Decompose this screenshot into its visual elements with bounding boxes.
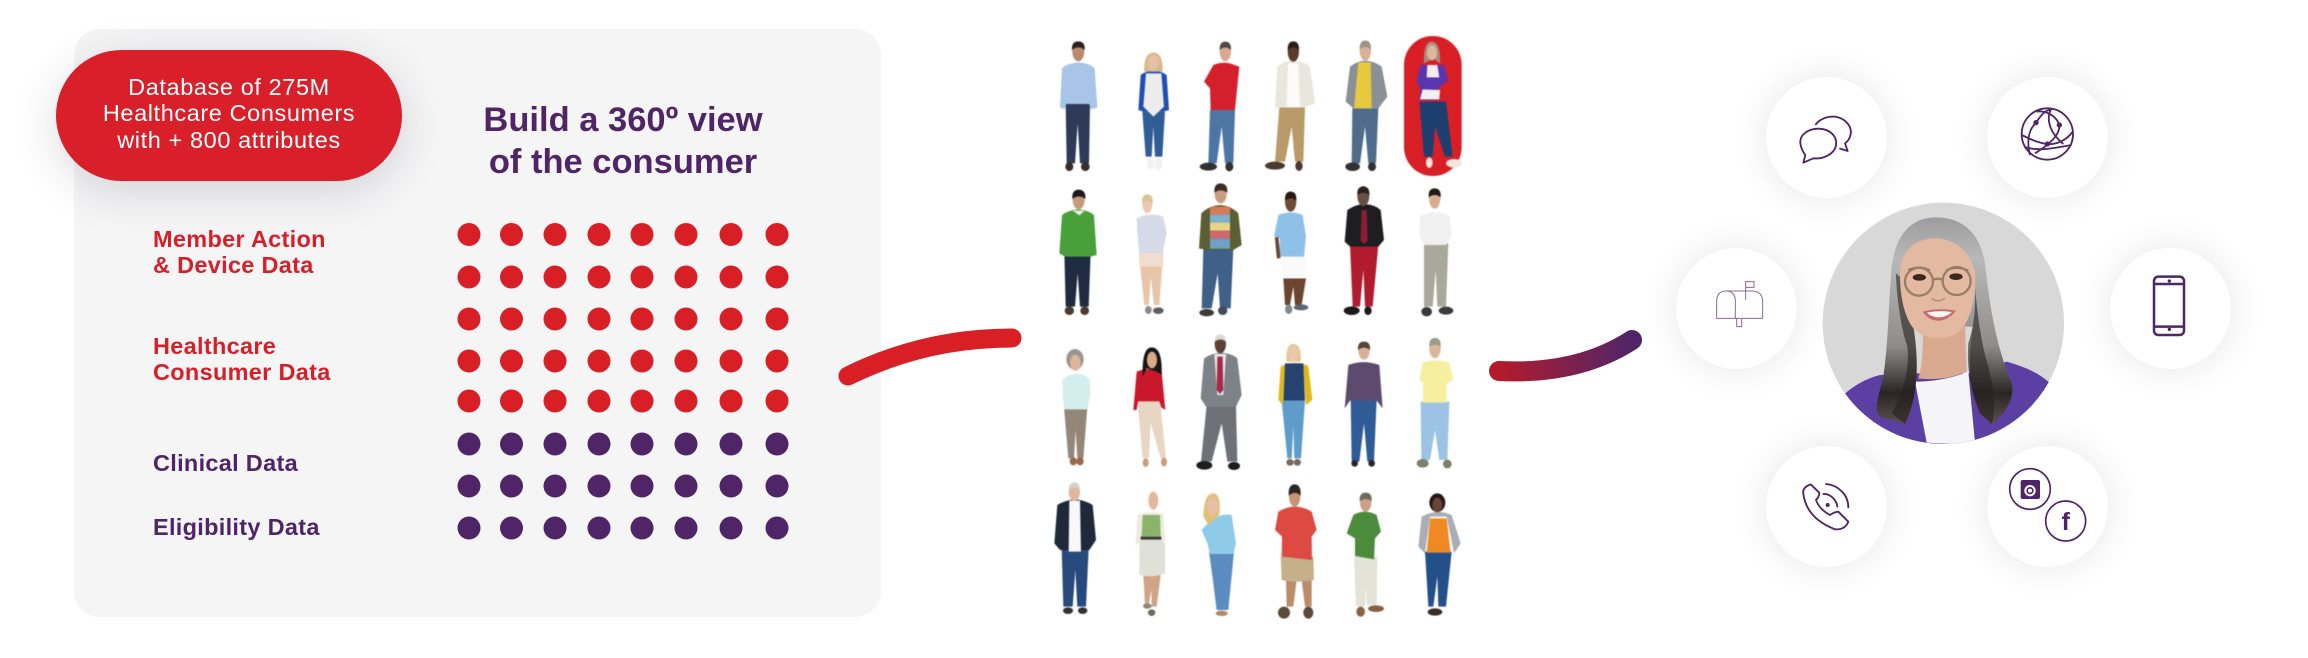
heading: build a 360 view: of the consumer (489, 142, 757, 180)
person 18 (1417, 338, 1453, 468)
icon bubble: phone call (1766, 446, 1887, 566)
label: clinical data: Clinical Data (153, 450, 298, 476)
heading: build a 360 view: Build a 360º view (483, 101, 763, 139)
person 4 (1265, 41, 1315, 171)
label: eligibility data: Eligibility Data (153, 514, 320, 540)
person 22 (1275, 484, 1317, 619)
person 9 (1199, 183, 1242, 316)
icon: instagram and facebook: f (2061, 508, 2070, 536)
icon bubble: social media (1986, 446, 2108, 566)
label: member action and device data (153, 226, 326, 278)
person 3 (1200, 42, 1239, 171)
callout text: Database of 275M (128, 74, 330, 100)
callout: database pill (56, 50, 402, 181)
person 7 (1059, 190, 1097, 315)
person 17 (1345, 342, 1383, 467)
label: healthcare consumer data (153, 333, 331, 385)
person 14 (1133, 347, 1167, 467)
person 20 (1136, 492, 1166, 616)
icon bubble: chat (1766, 77, 1887, 198)
person 13 (1062, 349, 1091, 465)
person 1 (1060, 41, 1097, 171)
highlight: red pill behind selected person (1404, 36, 1462, 176)
label: member action and device data: & Device Data (153, 252, 314, 278)
heading: build a 360 view (483, 101, 763, 180)
icon bubble: smartphone (2110, 248, 2230, 368)
label: healthcare consumer data: Consumer Data (153, 359, 331, 385)
label: member action and device data: Member Action (153, 226, 326, 252)
icon: phone call (1802, 483, 1850, 530)
person 19 (1054, 482, 1096, 614)
portrait: woman with grey hair (1822, 202, 2064, 444)
icon bubble: mailbox (1676, 248, 1796, 368)
icon: smartphone (2152, 275, 2186, 336)
person 21 (1202, 493, 1236, 616)
callout text: Healthcare Consumers (103, 100, 355, 126)
icon: globe network (2020, 107, 2074, 161)
person 5 (1345, 41, 1387, 171)
people grid (1054, 35, 1462, 620)
person 11 (1344, 186, 1384, 315)
callout text: with + 800 attributes (117, 126, 341, 152)
arrow: red connector stroke (838, 328, 1022, 386)
icon: mailbox (1716, 281, 1764, 328)
label: healthcare consumer data: Healthcare (153, 333, 276, 359)
person 23 (1347, 493, 1384, 617)
callout text (103, 74, 355, 152)
person 6 (highlighted) (1417, 42, 1462, 168)
person 8 (1137, 194, 1167, 314)
arrow: gradient connector stroke (1489, 330, 1642, 382)
person 10 (1274, 192, 1308, 314)
person 16 (1278, 344, 1312, 466)
icon: chat bubbles (1799, 116, 1852, 164)
panel: consumer data (74, 29, 881, 617)
person 2 (1138, 53, 1169, 170)
icon: instagram and facebook (2008, 468, 2086, 542)
person 24 (1418, 493, 1461, 616)
person 12 (1419, 188, 1453, 316)
icon bubble: globe (1986, 77, 2108, 198)
person 15 (1196, 335, 1242, 470)
